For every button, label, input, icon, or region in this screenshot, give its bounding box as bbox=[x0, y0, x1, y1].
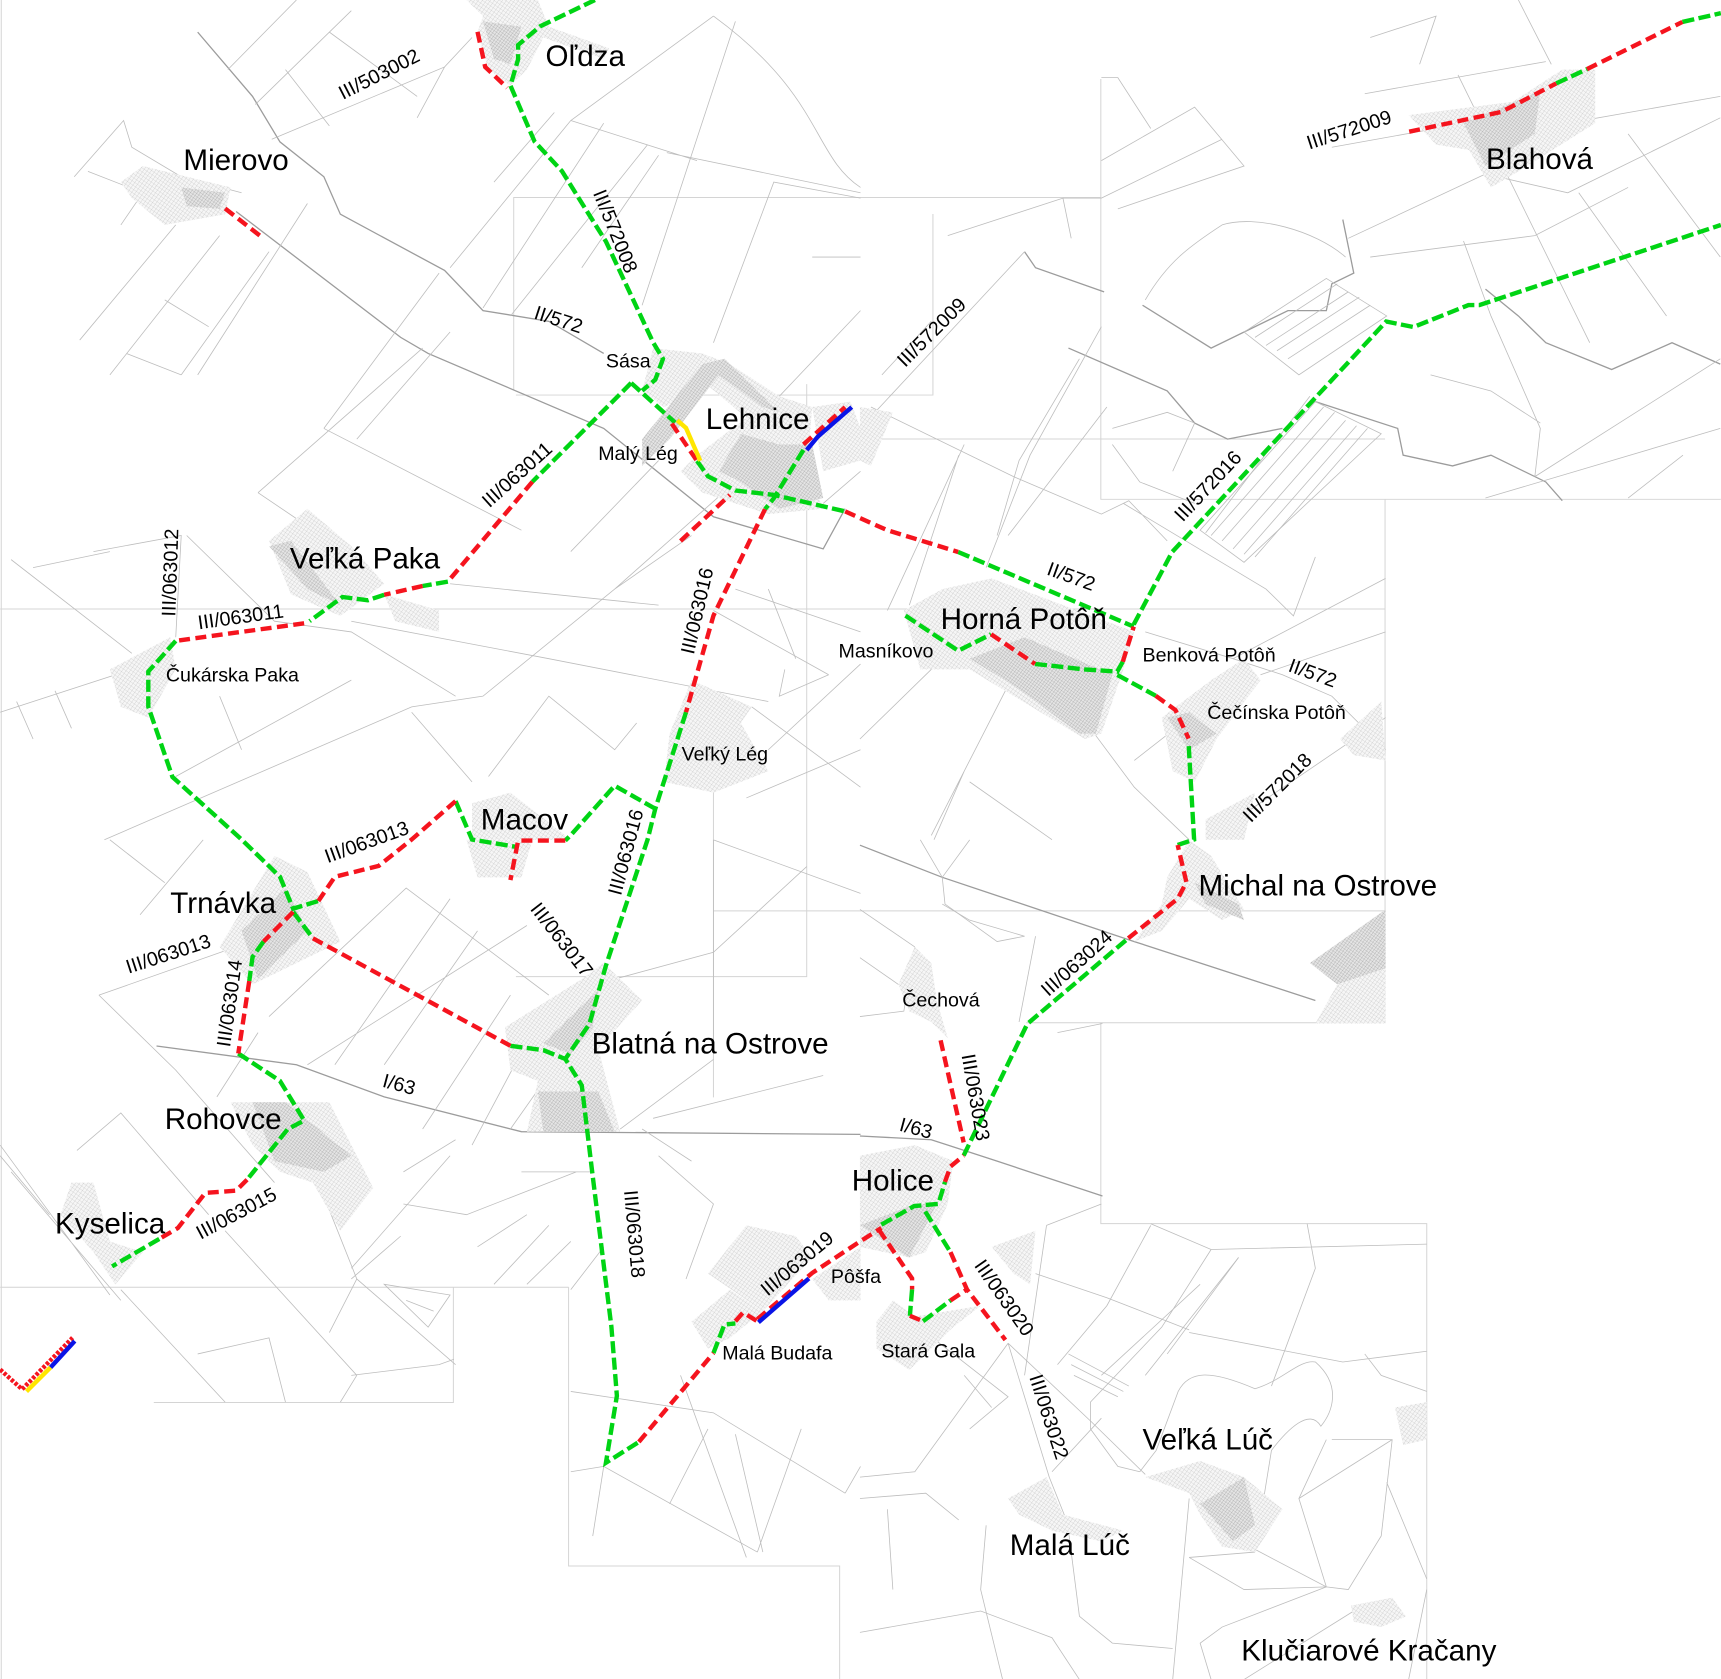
village: north-centre block bbox=[860, 407, 893, 466]
small village labels: Masníkovo bbox=[839, 640, 934, 662]
small village labels: Benková Potôň bbox=[1143, 645, 1276, 667]
road number labels: III/063018 bbox=[619, 1189, 649, 1279]
small village labels: Čečínska Potôň bbox=[1207, 701, 1346, 724]
road number labels: III/572009 bbox=[893, 294, 971, 371]
parcels and roads, north-west quadrant bbox=[0, 0, 861, 840]
town labels: Holice bbox=[852, 1165, 934, 1198]
road number labels: II/572 bbox=[1285, 655, 1339, 692]
village: Macov north bbox=[472, 793, 565, 840]
village textures, south-west quadrant bbox=[61, 840, 861, 1349]
small village labels: Veľký Lég bbox=[682, 743, 768, 765]
road number labels: III/063013 bbox=[123, 930, 214, 979]
road number labels: III/572016 bbox=[1170, 447, 1246, 526]
road number labels: I/63 bbox=[380, 1070, 418, 1100]
road number labels bbox=[123, 45, 1394, 1462]
village: east hamlet bbox=[1340, 702, 1386, 760]
village: Malá Lúč bbox=[1008, 1477, 1123, 1541]
village: Kyselica bbox=[61, 1183, 143, 1284]
village textures, south-east quadrant bbox=[860, 840, 1427, 1627]
small village labels: Stará Gala bbox=[881, 1340, 975, 1362]
blue segment at Malá Budafa bbox=[758, 1278, 809, 1322]
village: Veľká Paka bbox=[269, 509, 439, 632]
village textures, north-east quadrant bbox=[860, 70, 1595, 840]
town labels: Blahová bbox=[1486, 143, 1594, 176]
village: Blatná na Ostrove bbox=[505, 963, 642, 1132]
town labels: Mierovo bbox=[183, 144, 289, 177]
road number labels: III/063013 bbox=[322, 817, 412, 868]
village: Holice east bbox=[992, 1231, 1036, 1284]
village: Malá Budafa bbox=[692, 1290, 763, 1349]
town labels: Malá Lúč bbox=[1010, 1529, 1130, 1562]
road number labels: III/572008 bbox=[588, 187, 641, 276]
small village labels: Čukárska Paka bbox=[166, 663, 299, 686]
village textures, north-west quadrant bbox=[110, 0, 860, 840]
small village labels: Sása bbox=[606, 351, 651, 373]
road number labels: III/063014 bbox=[213, 958, 247, 1048]
village: Čechová bbox=[898, 947, 948, 1038]
village: Holice west bbox=[708, 1225, 812, 1311]
road number labels: III/063022 bbox=[1024, 1372, 1072, 1462]
road number labels: III/063015 bbox=[193, 1184, 281, 1244]
village: Veľký Lég bbox=[664, 680, 768, 793]
village: Trnávka bbox=[220, 856, 340, 984]
town labels: Blatná na Ostrove bbox=[592, 1027, 829, 1060]
small village labels: Čechová bbox=[902, 988, 980, 1011]
village: Michal north bbox=[1206, 793, 1255, 840]
road number labels: II/572 bbox=[531, 302, 585, 338]
road number labels: III/503002 bbox=[335, 45, 423, 105]
road number labels: III/063016 bbox=[604, 807, 648, 897]
road number labels: III/063011 bbox=[478, 438, 557, 512]
town labels: Veľká Paka bbox=[290, 542, 441, 575]
town labels: Rohovce bbox=[165, 1103, 282, 1136]
village: Mierovo bbox=[121, 166, 231, 225]
village: Holice bbox=[860, 1145, 953, 1258]
road segments in poor condition (red dashed) bbox=[159, 22, 1682, 1442]
village: Veľká Lúč bbox=[1145, 1461, 1282, 1552]
village: Sása, Malý Lég and Lehnice bbox=[642, 348, 860, 514]
town labels: Lehnice bbox=[706, 403, 810, 436]
road number labels: III/063024 bbox=[1037, 926, 1117, 1001]
parcels and roads, north-east quadrant bbox=[860, 0, 1720, 840]
town labels: Trnávka bbox=[170, 887, 277, 920]
village: Horná Potôň bbox=[904, 578, 1134, 739]
parcels and roads, south-west quadrant bbox=[0, 840, 861, 1557]
village: Rohovce bbox=[231, 1102, 373, 1231]
village: Čečínska Potôň bbox=[1162, 659, 1260, 782]
small village labels: Malá Budafa bbox=[722, 1343, 833, 1365]
village: Stará Gala bbox=[876, 1300, 981, 1370]
town labels: Horná Potôň bbox=[941, 603, 1107, 636]
road number labels: III/063019 bbox=[757, 1227, 838, 1301]
village: Klučiarové Kračany bbox=[1351, 1598, 1406, 1627]
small village labels bbox=[166, 351, 1346, 1365]
town labels: Klučiarové Kračany bbox=[1241, 1634, 1497, 1667]
town labels: Michal na Ostrove bbox=[1198, 869, 1437, 902]
road number labels: I/63 bbox=[897, 1114, 935, 1144]
small village labels: Malý Lég bbox=[598, 443, 678, 465]
road number labels: III/063020 bbox=[969, 1256, 1038, 1340]
village: Oľdza bbox=[467, 0, 609, 86]
road number labels: III/572009 bbox=[1304, 106, 1394, 154]
small village labels: Pôšfa bbox=[831, 1266, 881, 1288]
town labels: Macov bbox=[481, 804, 568, 837]
road number labels: III/572018 bbox=[1239, 749, 1317, 827]
legend sample lines bbox=[0, 1338, 75, 1391]
town labels: Oľdza bbox=[546, 40, 625, 73]
parcels and roads, south-east quadrant bbox=[860, 840, 1427, 1679]
village: east hamlet bbox=[1395, 1402, 1427, 1445]
village: Pôšfa bbox=[812, 1247, 860, 1300]
road number labels: II/572 bbox=[1044, 558, 1098, 596]
blue segment at Lehnice bbox=[807, 407, 852, 450]
road number labels: III/063023 bbox=[957, 1052, 994, 1143]
village: east settlement bbox=[1310, 909, 1386, 1024]
road number labels: III/063016 bbox=[677, 566, 718, 656]
village: Macov south bbox=[467, 840, 532, 877]
village: Michal na Ostrove bbox=[1134, 840, 1244, 942]
town labels: Veľká Lúč bbox=[1143, 1424, 1273, 1457]
village: Blahová bbox=[1409, 70, 1595, 187]
town labels: Kyselica bbox=[55, 1207, 166, 1240]
road number labels: III/063012 bbox=[158, 528, 183, 617]
yellow segment at Malý Lég bbox=[677, 420, 700, 461]
road number labels: III/063017 bbox=[526, 899, 597, 981]
village: Čukárska Paka bbox=[110, 637, 176, 718]
road number labels: III/063011 bbox=[196, 600, 285, 634]
